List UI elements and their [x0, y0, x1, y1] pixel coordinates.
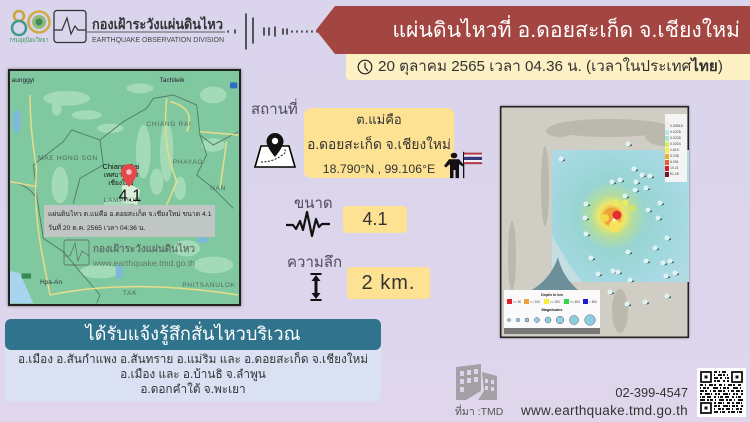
- shake legend: 6.091: [670, 160, 679, 164]
- qr code: [697, 368, 746, 417]
- shake legend: 0.0228: [670, 130, 681, 134]
- depth and magnitude legend: Depth in km: [541, 293, 563, 297]
- depth and magnitude legend: [504, 290, 600, 334]
- label: depth: ความลึก: [287, 254, 342, 271]
- depth and magnitude legend: > 600: [589, 300, 597, 304]
- depth and magnitude legend: <= 100: [530, 300, 540, 304]
- coordinates: 18.790°N , 99.106°E: [323, 162, 435, 176]
- depth value: 2 km.: [362, 272, 415, 294]
- title text: แผ่นดินไหวที่ อ.ดอยสะเก็ด จ.เชียงใหม่: [392, 19, 740, 42]
- icon: seismic wave: [286, 210, 330, 238]
- map caption box: [44, 205, 215, 237]
- map: Northern Thailand with epicentre: [8, 69, 241, 306]
- icon: damaged buildings: [456, 364, 497, 400]
- map place labels: Tachileik: [160, 77, 185, 84]
- label: magnitude: ขนาด: [294, 195, 333, 212]
- shake legend: 1.619: [670, 148, 679, 152]
- depth and magnitude legend: <= 600: [570, 300, 580, 304]
- map watermark: www.earthquake.tmd.go.th: [92, 258, 195, 268]
- felt areas text: อ.ดอกคำใต้ จ.พะเยา: [140, 382, 246, 396]
- map place labels: aunggyi: [12, 77, 34, 84]
- sea: [528, 257, 578, 292]
- shake legend: 0.0204: [670, 142, 681, 146]
- icon: person with Thai flag: [444, 152, 482, 178]
- label: location: สถานที่: [251, 101, 298, 118]
- icon: depth arrow: [310, 273, 322, 301]
- date and time bar: [346, 54, 750, 80]
- shake legend: 3.238: [670, 154, 679, 158]
- border lines: [10, 95, 238, 303]
- map place labels: Chiang Rai: [102, 162, 140, 171]
- panel: felt reports: [5, 319, 381, 402]
- shake legend: 0.0228: [670, 136, 681, 140]
- magnitude on map: 4.1: [119, 187, 141, 205]
- panel heading: [5, 319, 381, 350]
- map place labels: เชียงใหม่: [108, 179, 134, 187]
- depth and magnitude legend: <= 250: [550, 300, 560, 304]
- felt areas text: อ.เมือง และ อ.บ้านธิ จ.ลำพูน: [120, 367, 266, 381]
- icon: seismic waveform dots: [227, 13, 318, 50]
- map caption box: วันที่ 20 ต.ค. 2565 เวลา 04:36 น.: [48, 223, 145, 232]
- icon: epicentre pin: [121, 164, 137, 187]
- felt areas text: [18, 352, 368, 396]
- map place labels: [12, 77, 236, 297]
- map watermark: กองเฝ้าระวังแผ่นดินไหว: [93, 242, 195, 255]
- map watermark: [64, 240, 195, 268]
- map place labels: LAMPHUN: [104, 197, 140, 204]
- panel heading: ได้รับแจ้งรู้สึกสั่นไหวบริเวณ: [86, 324, 300, 344]
- shake legend: 0.00518: [670, 124, 683, 128]
- map place labels: เทศบาลนคร: [104, 172, 139, 179]
- magnitude value: 4.1: [362, 209, 388, 229]
- phone number: 02-399-4547: [615, 385, 688, 400]
- map place labels: PHAYAO: [173, 159, 203, 166]
- website: www.earthquake.tmd.go.th: [521, 403, 688, 418]
- shake legend: 51.28: [670, 172, 679, 176]
- map place labels: MAE HONG SON: [38, 155, 98, 162]
- felt areas text: อ.เมือง อ.สันกำแพง อ.สันทราย อ.แม่ริม และ อ.ดอยสะเก็ด จ.เชียงใหม่: [18, 352, 368, 366]
- district and province: อ.ดอยสะเก็ด จ.เชียงใหม่: [307, 137, 451, 152]
- icon: clock: [358, 60, 372, 74]
- map place labels: Hpa-An: [40, 279, 62, 286]
- logo: earthquake observation division: [53, 10, 225, 44]
- map place labels: PHITSANULOK: [182, 282, 236, 289]
- station marker tails: [561, 145, 679, 306]
- depth and magnitude legend: Magnitudes: [541, 308, 563, 312]
- station markers: [558, 142, 678, 306]
- logo: 80 years department emblem: [10, 10, 51, 44]
- epicentre cluster: [601, 200, 636, 232]
- shake legend: [665, 114, 687, 182]
- source credit: ที่มา :TMD: [455, 406, 503, 418]
- map place labels: NAN: [210, 185, 226, 192]
- logo: earthquake observation division: EARTHQUAKE OBSERVATION DIVISION: [92, 37, 224, 44]
- shake legend: 10.21: [670, 166, 679, 170]
- map place labels: TAK: [123, 290, 137, 297]
- map caption box: แผ่นดินไหว ต.แม่คือ อ.ดอยสะเก็ด จ.เชียงใหม่ ขนาด 4.1: [48, 209, 212, 218]
- location panel: [304, 108, 454, 178]
- subdistrict: ต.แม่คือ: [356, 112, 402, 127]
- magnitude value box: [343, 206, 407, 233]
- depth value box: [347, 267, 430, 299]
- icon: map pin: [254, 133, 296, 168]
- title banner: [316, 6, 750, 54]
- map place labels: CHIANG RAI: [147, 121, 191, 128]
- map: shake intensity: [500, 106, 689, 338]
- shake footprint: [552, 150, 689, 282]
- depth and magnitude legend: <= 50: [513, 300, 521, 304]
- date text: 20 ตุลาคม 2565 เวลา 04.36 น. (เวลาในประเทศไทย): [378, 58, 723, 75]
